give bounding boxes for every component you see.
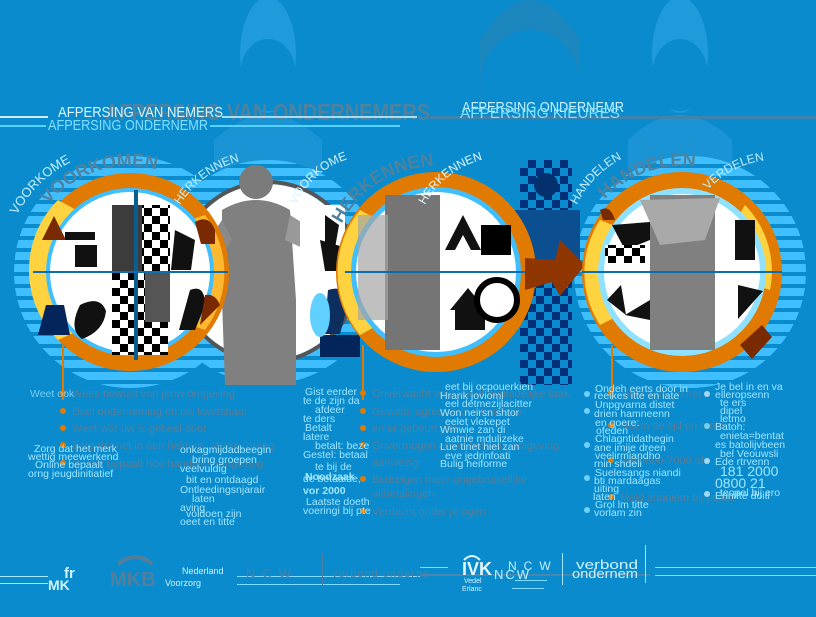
list right: Neem de tijd en meld (620, 420, 724, 432)
list middle overlay: Betalt (305, 422, 332, 434)
ring headings: VOORKOMEN (39, 153, 158, 201)
list far right: Ede rtrvenn (715, 456, 769, 468)
list middle overlay: Laatste doeth (306, 496, 370, 508)
list middle overlay: te de zijn da (303, 395, 360, 407)
logo: MKB: MKB (110, 569, 156, 591)
second title: AFPERSING KIEURES (460, 105, 620, 122)
list left: Deel onderneming en uw kwetsbaar (72, 406, 248, 418)
list center overlay: aatnie mdulizeke (445, 433, 524, 445)
list left overlay: oeet en titte (180, 516, 235, 528)
list right: Meld eerst in het (620, 388, 701, 400)
list left: Online bepaalt hoe handelen omgeving (72, 458, 263, 470)
list far right: 181 2000 (720, 463, 779, 479)
logo: MKB: Nederland (182, 566, 224, 576)
ring headings (9, 152, 764, 223)
list middle overlay: voeringi bij pte (303, 505, 371, 517)
icons: prevent (38, 216, 220, 339)
ring headings: HANDELEN (597, 154, 695, 198)
list middle overlay: de betaalde, (303, 473, 361, 485)
list middle: aanwezig (372, 457, 418, 469)
logo: verbond (572, 545, 646, 583)
list middle: Onvermogen om te betalen, omgeving (372, 440, 559, 452)
list middle: Geweld, agressie of intimidatie (372, 406, 522, 418)
list middle overlay: Gist eerder (305, 386, 357, 398)
list far right: Batoh: (715, 421, 745, 433)
list middle overlay: vor 2000 (303, 485, 346, 497)
ring headings: VERDELEN (702, 152, 764, 188)
list left overlay: veelvuldig (180, 463, 227, 475)
list middle: Verdacht onder je ogen (372, 506, 486, 518)
list left overlay: bit en ontdaagd (186, 474, 259, 486)
panel: ring recognise (336, 172, 536, 400)
logo: NCW right: NCW (494, 567, 531, 582)
list left overlay: Zorg dat het merk (34, 443, 118, 455)
list left overlay: voldoen zijn (186, 508, 242, 520)
list right overlay: laten (593, 491, 616, 503)
list middle: en er gebeurt iets (372, 423, 458, 435)
ring headings: HERKENNEN (174, 154, 238, 204)
list far right (704, 381, 785, 502)
list far right: es batolijvbeen (715, 439, 785, 451)
list right overlay: Suelesangs niandi (595, 467, 681, 479)
logo: verbond: ondernem (572, 566, 638, 581)
list left overlay (27, 388, 271, 528)
list middle: Onverwacht verzoek of onduidelijke taak (372, 388, 570, 400)
logo: NCW: verbond onderne (332, 568, 430, 580)
logo: MKB: MK (48, 577, 70, 593)
list far right: te ers (720, 397, 746, 409)
ghost rings (14, 156, 806, 388)
gray figure between rings (185, 165, 345, 385)
title block: AFPERSING VAN NEMERS (58, 104, 223, 121)
panel: ring prevent (29, 173, 229, 400)
list center overlay: Bulig heiforme (440, 458, 507, 470)
list left overlay: aving (180, 502, 205, 514)
list right overlay: veelirmiandho (595, 450, 661, 462)
logo: NCW (165, 566, 430, 588)
list far right: bel Veouwsli (720, 448, 778, 460)
title block: AFPERSING ONDERNEMR (48, 117, 208, 134)
logo: NCW right: NCW (508, 559, 558, 573)
list right (608, 388, 735, 504)
list middle overlay: Gestel: betaal (303, 449, 368, 461)
list middle overlay: afdeer (315, 404, 345, 416)
list right overlay: rnin shdeli (594, 458, 642, 470)
ring headings: HERKENNEN (331, 154, 432, 223)
logo: MKB: fr (64, 565, 75, 582)
icons: recognise (445, 215, 517, 330)
list far right: Ennifte doiti (715, 490, 770, 502)
list right overlay: bti mardaagas (594, 475, 661, 487)
list center overlay: Hrank jovioml (440, 390, 504, 402)
list center overlay: Won neirsn shtor (440, 407, 520, 419)
list middle overlay: te bij de (315, 461, 352, 473)
list middle: Bedreigen meer ongebruikelijke (372, 474, 527, 486)
hooded figures in background (214, 0, 732, 170)
list center overlay: eet bij ocpouerkien (445, 381, 533, 393)
list left overlay: onkagmijdadbeegin (180, 444, 271, 456)
list middle: uitbetalingen (372, 488, 434, 500)
list left: Weet wat uw is geheel doet (72, 423, 206, 435)
list right overlay: Unpgvarna distet (595, 399, 674, 411)
list right overlay: uiting (594, 483, 619, 495)
list left: Wees bewust van jouw omgeving (72, 388, 235, 400)
list center overlay: eelet vlekepet (445, 416, 510, 428)
list center overlay: eve jedrinfoati (445, 450, 510, 462)
person silhouette: prevent (112, 190, 170, 360)
panel: ring act (582, 172, 782, 400)
list middle overlay: Noodzaak (305, 471, 355, 483)
logo: NCW: NCW (246, 566, 298, 581)
list middle overlay: te ders (303, 413, 335, 425)
list middle (360, 388, 570, 518)
list left overlay: Weet ook (30, 388, 75, 400)
list left overlay: Online bepaalt (35, 459, 103, 471)
title block (0, 99, 816, 134)
list right overlay (584, 383, 688, 519)
list left overlay: wettig meewerkend (27, 451, 119, 463)
list center overlay (440, 381, 533, 470)
list middle overlay: latere (303, 431, 329, 443)
list right overlay: vorlam zin (594, 507, 642, 519)
list left overlay: orng jeugdinitiatief (28, 468, 113, 480)
list far right: enieta=bentat (720, 430, 784, 442)
ring headings: HANDELEN (570, 152, 621, 204)
list right overlay: Grol lm titte (595, 499, 649, 511)
list far right: Je bel in en va (715, 381, 783, 393)
footer lines (0, 553, 816, 585)
list right overlay: Ondeh eerts door in (595, 383, 688, 395)
list right overlay: ofeden (596, 425, 628, 437)
list left overlay: Ontleedingsnjarair (180, 484, 266, 496)
list far right: teopel bij ero (720, 487, 780, 499)
list right: Meld anoniem bij politie (620, 492, 735, 504)
logo: Vedel Erlanc (462, 556, 492, 593)
list right overlay: ane imije dreen (594, 442, 666, 454)
logo: NCW right (494, 553, 563, 589)
list far right: elleropsenn (715, 389, 769, 401)
navy figure with arrow (515, 160, 580, 385)
list left: Zorg dat het in een heldere, sterke, orang (72, 440, 274, 452)
list right overlay: drien hamneenn (594, 408, 670, 420)
list middle overlay (303, 386, 371, 517)
logo: Vedel Erlanc: Vedel (464, 578, 482, 585)
list middle overlay: betalt: beze (315, 440, 369, 452)
list right overlay: reeikes itte en iate (594, 390, 679, 402)
logo: Vedel Erlanc: IVK (462, 559, 492, 579)
icons middle figure (300, 205, 360, 357)
list left (60, 388, 274, 470)
list right overlay: Chlagntidathegin (595, 433, 674, 445)
logo: Vedel Erlanc: Erlanc (462, 586, 482, 593)
list center overlay: eel detmezijlacitter (445, 398, 532, 410)
list right overlay: en goere: (595, 417, 639, 429)
list center overlay: Wmwie zan di (440, 424, 505, 436)
list left overlay: laten (192, 493, 215, 505)
second title: AFPERSING ONDERNEMR (462, 99, 624, 116)
list center overlay: Lue tinet hiel zan (440, 441, 520, 453)
list left overlay: bring groepen (192, 454, 257, 466)
logo: MKB (48, 557, 224, 593)
list right: Bel 0800-7000 of (620, 455, 705, 467)
orange arrow (525, 240, 585, 296)
logo: NCW: Voorzorg (165, 578, 201, 588)
logo: verbond: verbond (576, 557, 638, 572)
title block: AFPERSING VAN ONDERNEMERS (105, 99, 430, 125)
list far right: 0800 21 (715, 475, 766, 491)
list far right: dipel (720, 405, 742, 417)
list far right: letmo (720, 413, 746, 425)
ring headings: HERKENNEN (418, 152, 482, 204)
icons: act (600, 208, 772, 359)
